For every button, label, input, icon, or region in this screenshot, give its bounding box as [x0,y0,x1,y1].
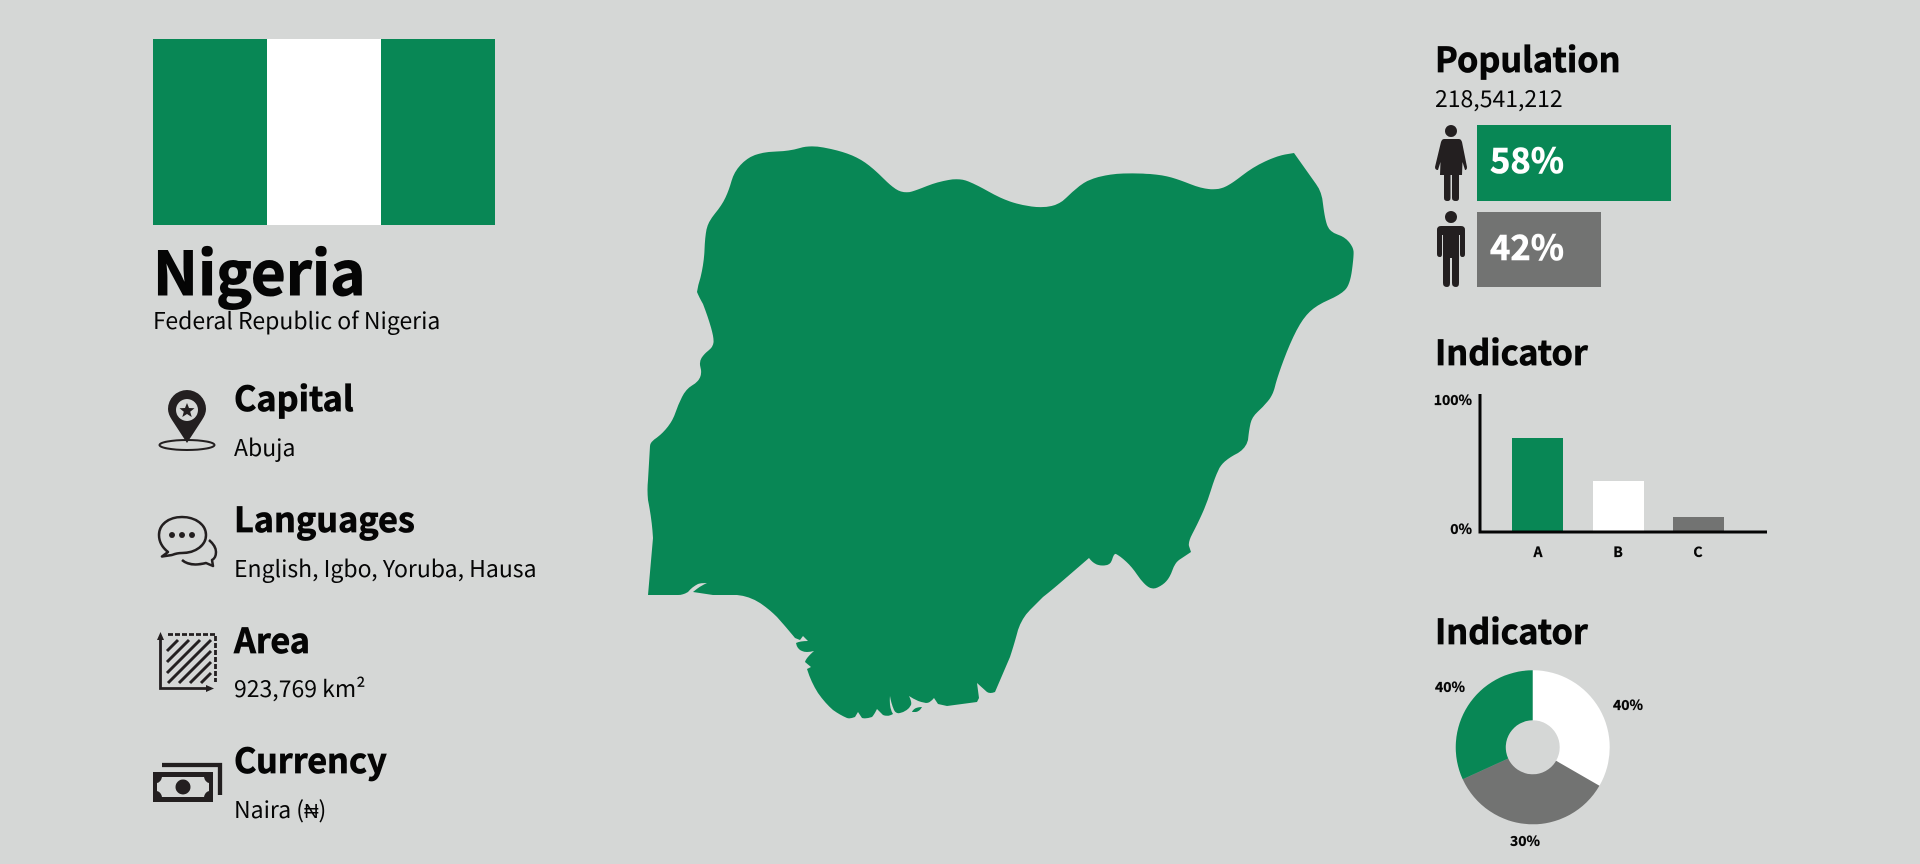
donut chart [1435,670,1644,851]
bar: men 42% [1477,212,1601,287]
value: capital: Abuja [234,429,295,463]
panel: donut chart indicator [1435,604,1644,851]
bar chart [1434,390,1767,562]
title: Nigeria [153,226,366,313]
donut chart: 30% [1510,831,1541,851]
subtitle: Federal Republic of Nigeria [153,302,440,336]
bar chart: C [1693,542,1703,562]
bar chart: A [1533,542,1544,562]
icon: banknotes [153,765,220,802]
heading: indicator: Indicator [1435,604,1588,654]
heading: population: Population [1435,32,1621,82]
heading: indicator: Indicator [1435,325,1588,375]
map of Nigeria [648,146,1354,718]
donut chart: 40% [1613,695,1644,715]
heading: area: Area [233,613,310,663]
bar chart: B [1613,542,1623,562]
bar: men 42%: 42% [1490,220,1564,270]
icon: woman [1435,125,1467,201]
panel: population [1435,32,1671,287]
bar chart: 0% [1450,519,1473,539]
value: languages: English, Igbo, Yoruba, Hausa [234,550,537,584]
icon: man [1437,211,1465,287]
donut chart: 40% [1435,677,1466,697]
value: area: 923,769 km² [234,670,366,704]
panel: currency [153,733,387,825]
panel: languages [159,492,537,584]
icon: map pin [160,390,214,450]
panel: bar chart indicator [1434,325,1767,562]
panel: area [157,613,366,704]
bar: women 58%: 58% [1490,133,1564,183]
value: currency: Naira (₦) [234,791,326,825]
bar chart: 100% [1434,390,1473,410]
bar: women 58% [1477,125,1671,201]
value: population: 218,541,212 [1435,80,1563,114]
panel: capital [160,371,354,463]
heading: languages: Languages [234,492,415,542]
heading: capital: Capital [234,371,354,421]
heading: currency: Currency [234,733,387,783]
flag of Nigeria [153,39,495,225]
icon: hatched area [157,632,216,692]
icon: speech bubbles [159,517,216,566]
